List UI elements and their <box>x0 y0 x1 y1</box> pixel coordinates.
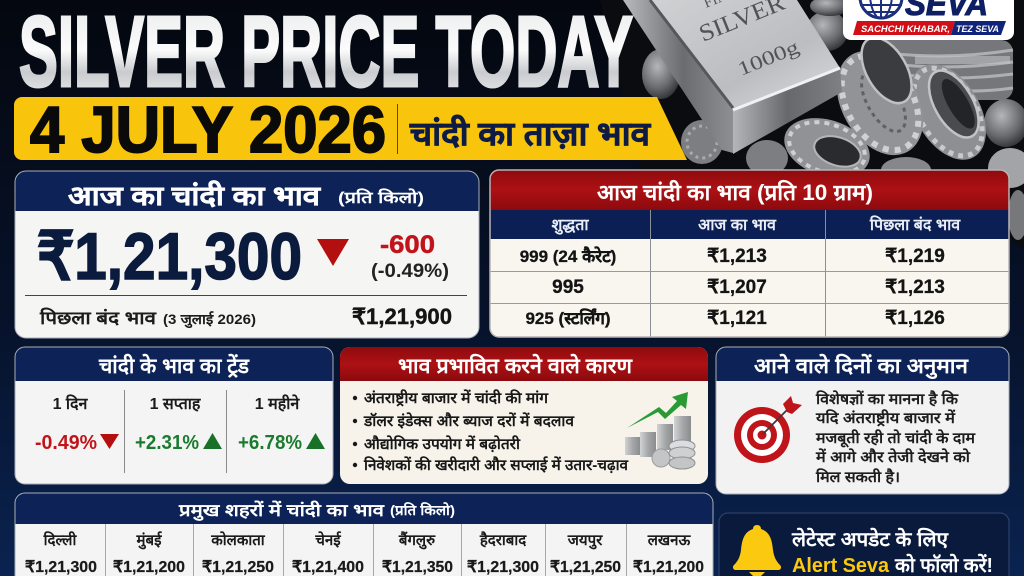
city prices: ₹1,21,250 <box>550 559 621 576</box>
table rows: 999 (24 कैरेट) <box>520 246 616 266</box>
city prices: ₹1,21,200 <box>113 559 185 576</box>
factor list: डॉलर इंडेक्स और ब्याज दरों में बदलाव <box>363 412 575 430</box>
city prices: ₹1,21,300 <box>25 559 97 576</box>
follow text line 1: लेटेस्ट अपडेट के लिए <box>791 527 949 551</box>
table rows: ₹1,213 <box>707 246 767 267</box>
table rows: ₹1,121 <box>707 308 767 329</box>
table rows: 925 (स्टर्लिंग) <box>525 308 611 328</box>
ring, right <box>894 51 1002 173</box>
trend 1 month: +6.78% <box>238 432 302 454</box>
city names: हैदराबाद <box>479 531 527 549</box>
factor list: औद्योगिक उपयोग में बढ़ोतरी <box>364 435 521 453</box>
panel: forecast <box>716 347 1009 494</box>
logo: Alert Seva <box>843 0 1014 40</box>
city names: कोलकाता <box>210 531 266 549</box>
city names <box>43 531 691 550</box>
factor list <box>353 389 629 474</box>
change: -600 <box>380 231 435 259</box>
ring, bottom <box>777 108 877 188</box>
forecast text: यदि अंतराष्ट्रीय बाजार में <box>815 409 956 427</box>
coin stack at right <box>867 40 1013 100</box>
trend 1 day <box>36 434 119 449</box>
table rows: 995 <box>552 277 584 298</box>
factor list: अंतराष्ट्रीय बाजार में चांदी की मांग <box>364 389 549 407</box>
heading: आज का चांदी का भाव <box>68 180 321 211</box>
icon: down triangle <box>317 239 349 266</box>
panel: factors affecting price <box>340 347 708 484</box>
table rows: ₹1,219 <box>885 246 945 267</box>
logo: Alert Seva: TEZ SEVA <box>956 24 999 35</box>
main price: ₹1,21,300 <box>37 219 302 293</box>
panel: silver price trend <box>15 347 333 484</box>
panel: today's price per kg <box>15 171 479 338</box>
period labels <box>53 394 300 413</box>
forecast text: मिल सकती है। <box>815 468 900 486</box>
follow text line 2 <box>792 553 993 576</box>
trend 1 week: +2.31% <box>135 432 199 454</box>
trend 1 month <box>238 433 325 449</box>
previous close label: पिछला बंद भाव <box>39 307 157 328</box>
table header <box>552 215 961 235</box>
heading: भाव प्रभावित करने वाले कारण <box>398 353 633 378</box>
table header: आज का भाव <box>698 217 777 234</box>
city names: लखनऊ <box>647 532 691 549</box>
panel: price per 10 gram table <box>490 170 1009 337</box>
heading: प्रमुख शहरों में चांदी का भाव <box>178 500 386 521</box>
period labels: 1 दिन <box>53 394 89 413</box>
logo: Alert Seva: SACHCHI KHABAR, <box>861 24 950 35</box>
unit: (प्रति किलो) <box>390 502 455 518</box>
icon: target <box>734 396 802 463</box>
forecast text: विशेषज्ञों का मानना है कि <box>815 390 960 408</box>
heading: आने वाले दिनों का अनुमान <box>754 353 969 380</box>
city names: मुंबई <box>136 531 162 550</box>
silver bar <box>623 0 842 154</box>
table header: पिछला बंद भाव <box>869 215 961 234</box>
city prices: ₹1,21,300 <box>467 559 539 576</box>
city names: बैंगलुरु <box>398 531 436 550</box>
panel: follow Alert Seva <box>719 513 1009 576</box>
table rows: ₹1,213 <box>885 277 945 298</box>
icon: globe <box>860 0 902 18</box>
previous close date: (3 जुलाई 2026) <box>163 311 256 329</box>
period labels: 1 सप्ताह <box>150 396 202 413</box>
city prices: ₹1,21,200 <box>633 559 704 576</box>
table rows: ₹1,207 <box>707 277 767 298</box>
date: 4 JULY 2026 <box>30 93 386 166</box>
city prices <box>25 559 704 576</box>
change percent: (-0.49%) <box>371 261 449 282</box>
ring, centre <box>817 29 944 170</box>
heading: चांदी के भाव का ट्रेंड <box>98 353 250 378</box>
city prices: ₹1,21,400 <box>292 559 364 576</box>
silver bar: 1000g <box>735 36 802 81</box>
unit: (प्रति किलो) <box>338 188 424 207</box>
forecast text: मजबूती रही तो चांदी के दाम <box>815 429 976 448</box>
city prices: ₹1,21,350 <box>382 559 453 576</box>
trend 1 day: -0.49% <box>35 432 97 454</box>
forecast text: में आगे और तेजी देखने को <box>815 448 971 466</box>
city prices: ₹1,21,250 <box>202 559 274 576</box>
table rows <box>520 246 945 329</box>
table rows: ₹1,126 <box>885 308 945 329</box>
table header: शुद्धता <box>552 217 589 235</box>
icon: rising silver bars and coins <box>625 392 695 469</box>
date banner <box>14 93 687 166</box>
forecast text <box>815 390 976 486</box>
city names: चेनई <box>314 531 342 549</box>
heading: आज चांदी का भाव (प्रति 10 ग्राम) <box>597 179 873 205</box>
previous close price: ₹1,21,900 <box>352 304 452 329</box>
icon: bell <box>733 525 781 576</box>
jewellery photo: silver bar, rings and coins <box>600 0 1024 250</box>
panel: major city prices <box>15 493 713 576</box>
banner hindi subtitle: चांदी का ताज़ा भाव <box>409 114 652 152</box>
city names: दिल्ली <box>43 531 77 549</box>
trend 1 week <box>136 433 222 449</box>
city names: जयपुर <box>567 532 603 550</box>
period labels: 1 महीने <box>255 394 300 413</box>
factor list: निवेशकों की खरीदारी और सप्लाई में उतार-चढ़ाव <box>363 456 629 474</box>
